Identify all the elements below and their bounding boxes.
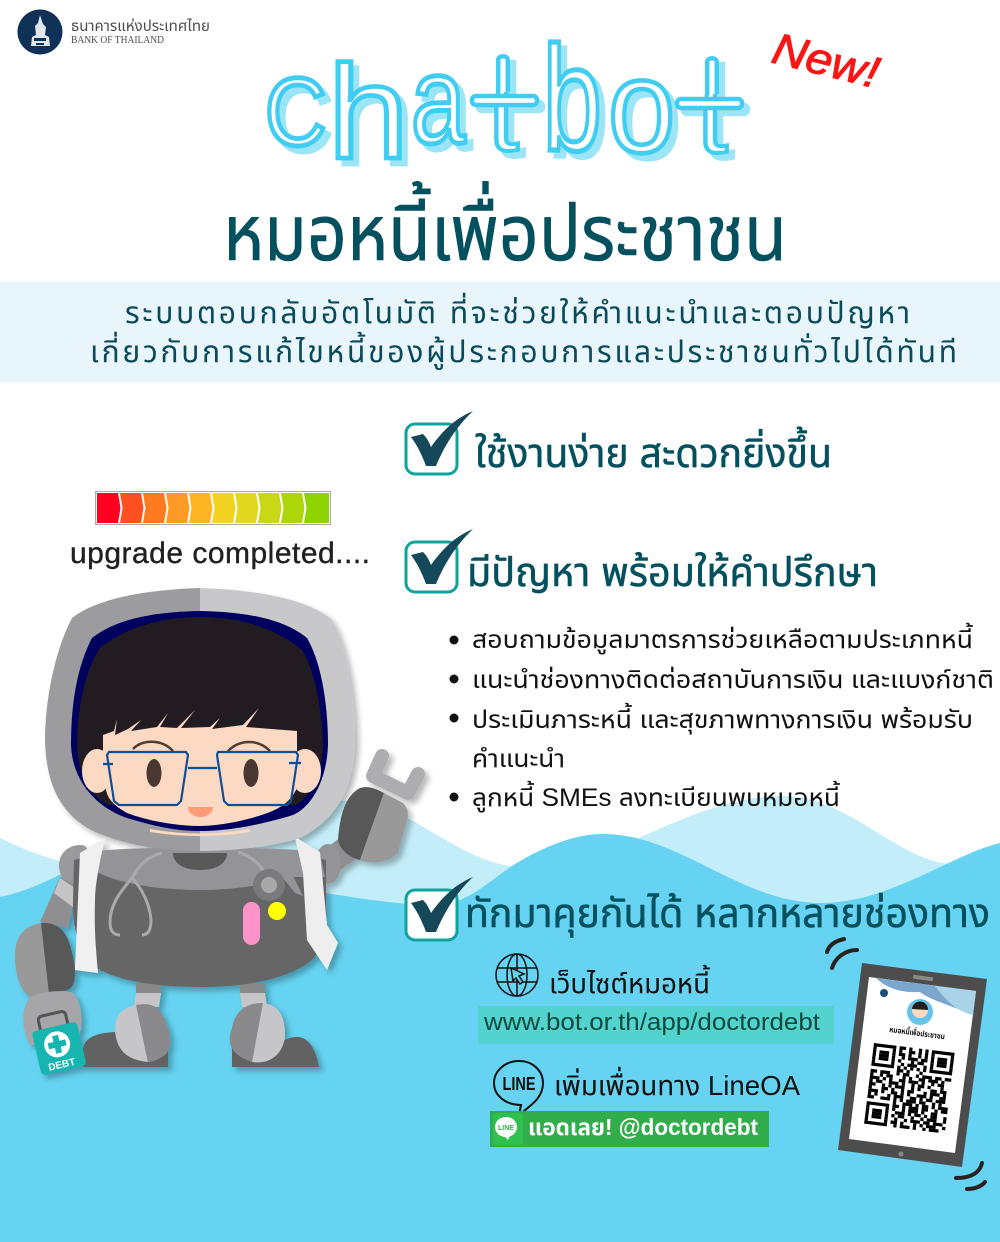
lab coat — [75, 837, 338, 973]
subtitle: หมอหนี้เพื่อประชาชน — [223, 181, 787, 277]
robot legs and feet — [83, 983, 319, 1067]
motion marks around tablet — [827, 939, 985, 1189]
icon: globe — [496, 954, 538, 996]
label: upgrade completed: upgrade completed.... — [70, 537, 370, 570]
title letters: h — [328, 39, 409, 187]
checkbox 3 — [406, 877, 473, 940]
eyebrows — [133, 742, 270, 751]
icon: LINE bubble: LINE — [502, 1074, 536, 1094]
progress bar — [96, 492, 330, 524]
title shadow layer: a — [417, 37, 472, 176]
mouth — [188, 807, 213, 817]
stethoscope — [110, 852, 263, 935]
hair — [77, 617, 323, 805]
bullet list: คำแนะนำ — [472, 745, 565, 773]
heading: ready to advise: มีปัญหา พร้อมให้คำปรึกษา — [467, 551, 878, 595]
robot left arm — [15, 845, 89, 1045]
logo: Bank of Thailand — [18, 10, 210, 54]
website url band — [478, 1006, 834, 1044]
title letters: C — [265, 58, 326, 166]
label: website: เว็บไซต์หมอหนี้ — [549, 964, 710, 999]
title letters — [265, 17, 742, 187]
QR code — [864, 1045, 954, 1132]
bullet list: สอบถามข้อมูลมาตรการช่วยเหลือตามประเภทหนี้ — [472, 622, 973, 655]
badge: New!: New! — [768, 24, 884, 98]
visor — [71, 611, 328, 831]
robot doctor character — [15, 588, 418, 1076]
bullet list — [450, 622, 994, 813]
bullet list: ประเมินภาระหนี้ และสุขภาพทางการเงิน พร้อมรับ — [472, 702, 973, 735]
description band — [0, 282, 1000, 382]
title letters: a — [411, 31, 466, 170]
stethoscope chest piece — [253, 869, 285, 901]
title shadow layer: b — [548, 23, 608, 188]
title letters: t — [697, 65, 728, 174]
first aid bag: DEBT: DEBT — [47, 1057, 76, 1074]
eyes — [146, 759, 258, 787]
LINE add friend button — [490, 1111, 769, 1147]
logo: Bank of Thailand: ธนาคารแห่งประเทศไทย — [71, 17, 210, 35]
title shadow layer: C — [271, 64, 332, 172]
title shadow layer: h — [334, 45, 415, 193]
title shadow layer — [271, 23, 748, 193]
background waves — [0, 796, 1000, 1242]
first aid bag: DEBT — [29, 1009, 87, 1076]
checkbox 2 — [406, 529, 473, 592]
website url band: www.bot.or.th/app/doctordebt — [483, 1009, 820, 1036]
heading: easy to use: ใช้งานง่าย สะดวกยิ่งขึ้น — [475, 426, 832, 476]
description band: ระบบตอบกลับอัตโนมัติ ที่จะช่วยให้คำแนะนำและตอบปัญหา — [125, 292, 910, 330]
title letters: o — [608, 32, 675, 180]
pink badge and yellow button — [243, 902, 286, 945]
heading: many channels: ทักมาคุยกันได้ หลากหลายช่องทาง — [465, 892, 990, 937]
description band: เกี่ยวกับการแก้ไขหนี้ของผู้ประกอบการและประชาชนทั่วไปได้ทันที — [90, 331, 957, 370]
title shadow layer: o — [614, 38, 681, 186]
label: add LineOA: เพิ่มเพื่อนทาง LineOA — [554, 1066, 800, 1101]
title shadow layer: t — [494, 69, 525, 178]
title: Chatbot — [265, 17, 748, 193]
LINE add friend button: แอดเลย! @doctordebt — [528, 1114, 758, 1140]
face — [82, 708, 321, 836]
checkbox 1 — [406, 411, 473, 474]
robot torso — [73, 848, 326, 987]
tablet with QR code: หมอหนี้เพื่อประชาชน — [889, 1023, 946, 1041]
bullet list: แนะนำช่องทางติดต่อสถาบันการเงิน และแบงก์ชาติ — [472, 666, 994, 694]
LINE add friend button: LINE — [498, 1125, 514, 1132]
title shadow layer: t — [703, 71, 734, 180]
logo: Bank of Thailand: BANK OF THAILAND — [71, 35, 164, 46]
icon: LINE bubble — [494, 1061, 543, 1115]
helmet — [45, 588, 355, 851]
bullet list: ลูกหนี้ SMEs ลงทะเบียนพบหมอหนี้ — [472, 780, 840, 813]
robot right arm — [315, 756, 418, 884]
tablet with QR code — [838, 963, 987, 1167]
glasses — [103, 752, 301, 805]
title letters: t — [488, 63, 519, 172]
title letters: b — [542, 17, 602, 182]
